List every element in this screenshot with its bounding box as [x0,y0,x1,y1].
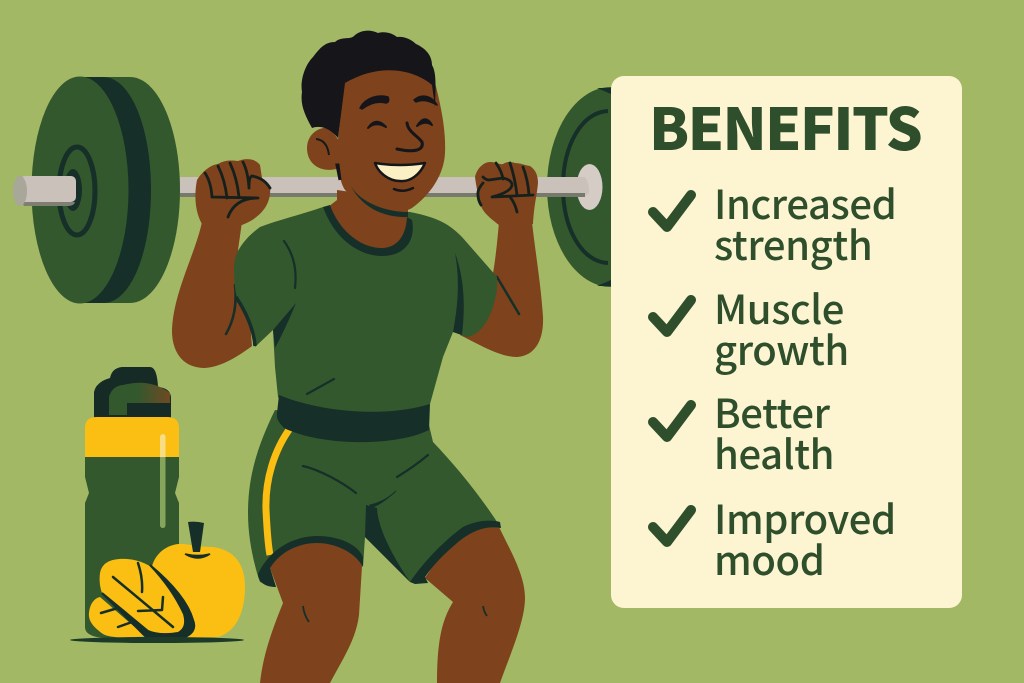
collar [323,205,413,256]
left arm [172,222,252,368]
illustration: yellow apple [151,522,245,638]
illustration: barbell left plates [32,76,180,304]
text: better health: health [714,423,834,481]
face [338,61,445,212]
illustration: water bottle [85,367,179,638]
chin and jaw [394,188,413,191]
text: improved mood: Improved [714,488,896,546]
hair [302,31,436,138]
text: better health: Better [714,382,830,440]
sleeve hem [236,297,255,346]
left hand [195,159,270,225]
illustration: leaves [89,559,194,639]
eyes [368,119,432,128]
illustration: barbell bar [13,176,589,206]
waistband [277,395,430,442]
benefit: increased strength [648,173,896,272]
bottle body [85,457,179,638]
text: muscle growth [714,278,849,377]
mouth [375,163,425,181]
nose [397,123,422,151]
icon: check mark [648,505,696,547]
right arm [460,222,543,357]
knee lines [303,606,487,622]
shirt folds [284,241,334,394]
text: increased strength: strength [714,214,872,272]
benefit: improved mood [648,488,896,587]
benefit: muscle growth [648,278,849,377]
text: increased strength [714,173,896,272]
illustration: ground shadow [70,637,244,643]
eyebrows [360,96,437,109]
text: muscle growth: Muscle [714,278,844,336]
shirt [234,207,497,420]
illustration: weightlifter [172,31,543,683]
bottle band [85,417,179,457]
text: improved mood [714,488,896,587]
text: improved mood: mood [714,529,825,587]
crotch shadow [365,505,410,582]
ear [307,128,342,170]
heading: benefits: BENEFITS [649,83,921,167]
legs [260,535,363,683]
icon: check mark [648,190,696,232]
right hem [410,521,501,584]
benefit: better health [648,382,834,481]
side stripe [266,427,291,555]
left hem [258,536,363,587]
text: muscle growth: growth [714,319,849,377]
text: increased strength: Increased [714,173,896,231]
icon: check mark [648,400,696,442]
arm lines [226,277,519,334]
icon: check mark [648,295,696,337]
bottle cap [94,367,171,418]
shorts [248,410,501,587]
panel: benefits [611,76,962,608]
right hand [475,162,538,225]
neck [328,190,408,250]
illustration: barbell right plate [547,87,675,287]
text: better health [714,382,834,481]
